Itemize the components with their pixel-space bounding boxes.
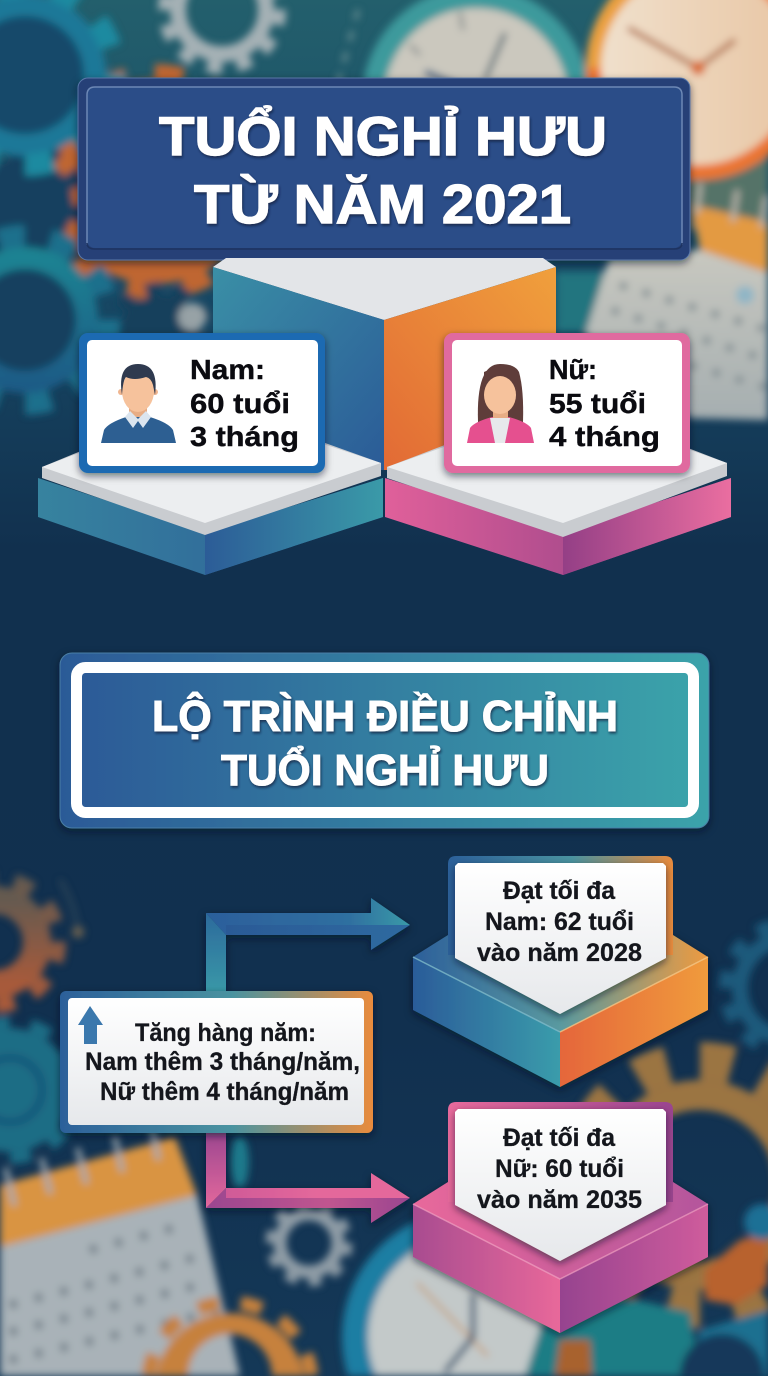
text: Nam maximum: Đạt tối đa	[503, 877, 616, 905]
lower left teal gear	[0, 1022, 78, 1158]
text: Nam maximum: Nam: 62 tuổi	[485, 908, 634, 936]
white pointer card	[455, 1109, 666, 1261]
left teal gear	[0, 236, 109, 404]
text: Nữ maximum: Đạt tối đa	[503, 1124, 616, 1152]
milestone: Nam 2028	[413, 856, 708, 1087]
annual increase text: Tăng hàng năm:	[135, 1019, 316, 1047]
text: Nam maximum: vào năm 2028	[477, 939, 642, 967]
white pointer card	[455, 863, 666, 1014]
right podium base	[385, 400, 731, 575]
bottom grey gear	[270, 1204, 348, 1282]
text: Nam maximum	[477, 877, 642, 967]
top grey gear	[165, 0, 279, 67]
title text	[159, 105, 607, 235]
milestone: Nữ 2035	[413, 1102, 708, 1333]
title text: TUỔI NGHỈ HƯU	[159, 105, 607, 167]
text: Nam: 3 tháng	[190, 421, 299, 452]
icon: man	[101, 364, 176, 443]
small pendulum line	[60, 880, 78, 932]
dashes near top centre	[332, 10, 358, 105]
text: Nữ: 4 tháng	[549, 421, 660, 452]
annual increase text: Nữ thêm 4 tháng/năm	[100, 1078, 349, 1106]
left podium base	[38, 400, 383, 575]
icon: up arrow	[78, 1006, 103, 1044]
title banner	[78, 78, 690, 260]
text: Nữ maximum: vào năm 2035	[477, 1186, 642, 1214]
text: Nữ maximum	[477, 1124, 642, 1214]
right orange gear	[576, 1061, 768, 1309]
right calendar	[585, 185, 768, 420]
text: Nam: Nam:	[190, 354, 265, 385]
annual increase text: Nam thêm 3 tháng/năm,	[85, 1048, 360, 1076]
bottom left calendar	[0, 1128, 240, 1376]
text: Nam: 60 tuổi	[190, 388, 290, 419]
frame	[448, 856, 673, 955]
card: Nam	[79, 333, 325, 473]
title text: TỪ NĂM 2021	[194, 173, 571, 235]
top left blue gear	[0, 0, 115, 165]
roadmap heading: TUỔI NGHỈ HƯU	[221, 744, 549, 795]
arrow: to Nam maximum	[206, 898, 410, 995]
card: Nữ	[444, 333, 690, 473]
lower left orange gear	[0, 880, 57, 1004]
left orange gear	[47, 74, 263, 290]
bottom clock	[342, 1209, 598, 1376]
frame	[448, 1102, 673, 1202]
arrow: to Nữ maximum	[206, 1130, 410, 1223]
text: Nữ	[549, 354, 660, 452]
icon: woman	[467, 364, 534, 443]
annual increase text	[85, 1019, 360, 1106]
roadmap banner	[60, 653, 709, 828]
gap behind clocks	[570, 120, 768, 230]
top right clock	[586, 0, 768, 180]
text: Nam	[190, 354, 299, 452]
roadmap heading	[152, 690, 618, 795]
text: Nữ: 55 tuổi	[549, 388, 646, 419]
bottom right gears and patches	[525, 1204, 768, 1376]
top centre clock	[362, 0, 590, 214]
block base	[413, 935, 708, 1087]
text: Nữ maximum: Nữ: 60 tuổi	[495, 1155, 624, 1183]
central 3D podium	[213, 258, 556, 470]
annual increase card	[60, 991, 373, 1133]
right teal gear	[726, 924, 768, 1052]
text: Nữ: Nữ:	[549, 354, 597, 385]
teal patch beside podium	[556, 272, 606, 332]
dark navy gear	[0, 149, 81, 261]
block base	[413, 1182, 708, 1333]
teal spot beside pink arrow	[231, 1136, 249, 1188]
roadmap heading: LỘ TRÌNH ĐIỀU CHỈNH	[152, 690, 618, 741]
bottom orange gear	[148, 1303, 312, 1376]
dark gear lower centre	[114, 289, 206, 381]
